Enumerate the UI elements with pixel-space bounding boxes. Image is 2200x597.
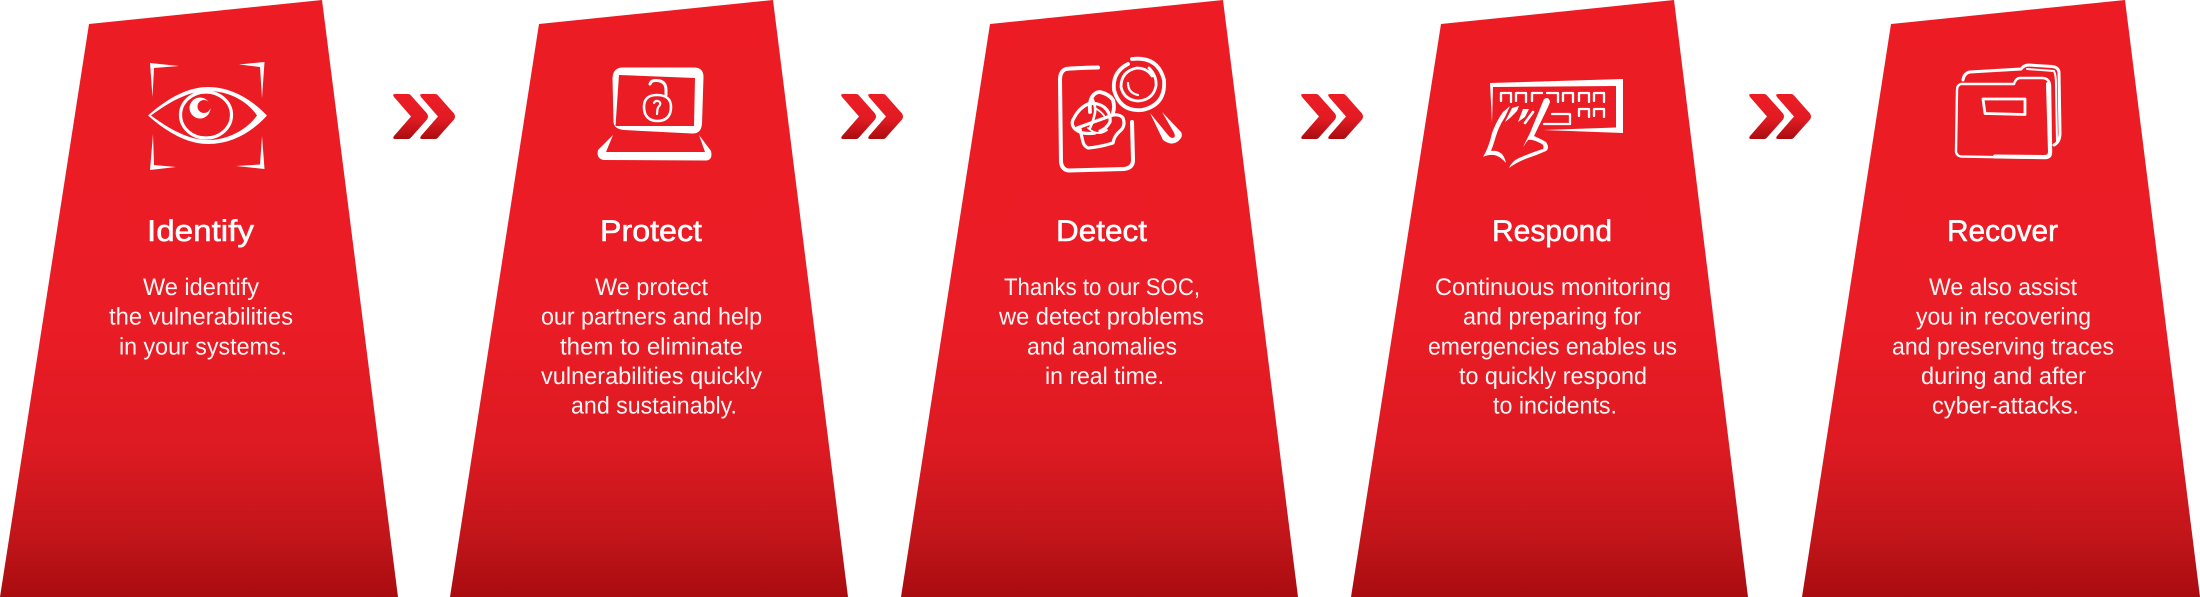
text block: [998, 274, 1204, 390]
text block: to incidents.: [1493, 393, 1617, 420]
arrow: Detect to Respond: [1301, 94, 1363, 139]
text block: [541, 274, 762, 420]
arrow: Respond to Recover: [1749, 94, 1811, 139]
icon: eye in viewfinder: [148, 62, 267, 170]
text block: [1892, 274, 2114, 420]
panel: Respond: [1351, 0, 1748, 597]
text block: We also assist: [1929, 274, 2077, 301]
text block: in your systems.: [119, 333, 287, 360]
text block: and sustainably.: [571, 393, 737, 420]
panel background: [450, 0, 848, 597]
text block: [1428, 274, 1677, 420]
text block: cyber-attacks.: [1932, 393, 2079, 420]
panel background: [901, 0, 1298, 597]
text block: and preserving traces: [1892, 333, 2114, 360]
arrow: Identify to Protect: [393, 94, 455, 139]
arrow: Protect to Detect: [841, 94, 903, 139]
text block: and anomalies: [1027, 333, 1177, 360]
panel background: [0, 0, 398, 597]
panel: Detect: [901, 0, 1298, 597]
panel: Protect: [450, 0, 848, 597]
text block: in real time.: [1045, 363, 1164, 390]
heading: Identify: [147, 215, 254, 248]
icon: hand pressing keyboard: [1483, 79, 1623, 168]
panel background: [1351, 0, 1748, 597]
text block: and preparing for: [1463, 304, 1641, 331]
text block: during and after: [1921, 363, 2086, 390]
icon: folders: [1956, 65, 2060, 158]
text block: emergencies enables us: [1428, 333, 1677, 360]
text block: to quickly respond: [1459, 363, 1647, 390]
text block: our partners and help: [541, 304, 762, 331]
heading: Protect: [600, 215, 703, 248]
heading: Respond: [1492, 215, 1612, 248]
icon: document with magnifier: [1060, 59, 1182, 170]
panel: Identify: [0, 0, 398, 597]
text block: Thanks to our SOC,: [1004, 274, 1200, 301]
text block: Continuous monitoring: [1435, 274, 1671, 301]
icon: laptop with open padlock: [598, 68, 711, 160]
panel background: [1802, 0, 2200, 597]
heading: Detect: [1056, 215, 1148, 248]
text block: vulnerabilities quickly: [541, 363, 762, 390]
text block: We protect: [595, 274, 708, 301]
text block: the vulnerabilities: [109, 304, 293, 331]
panel: Recover: [1802, 0, 2200, 597]
text block: them to eliminate: [560, 333, 743, 360]
text block: We identify: [143, 274, 259, 301]
text block: we detect problems: [998, 304, 1204, 331]
text block: [109, 274, 293, 360]
heading: Recover: [1947, 215, 2058, 248]
text block: you in recovering: [1916, 304, 2091, 331]
